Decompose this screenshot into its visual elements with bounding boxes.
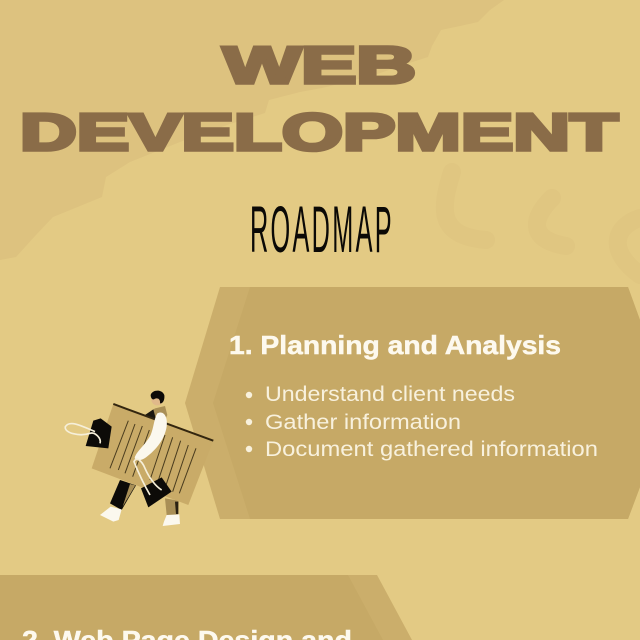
panel 1 list: Gather information (265, 410, 461, 434)
torso (145, 406, 167, 423)
back leg (165, 498, 179, 515)
panel 2 inner shape (0, 575, 383, 640)
panel 1 outer hexagon (185, 287, 640, 519)
head (151, 393, 163, 405)
hair (151, 391, 164, 403)
panel: web page design (0, 575, 412, 640)
panel 1 heading: 1. Planning and Analysis (229, 330, 561, 360)
panel 1 inner hexagon (213, 287, 640, 519)
left bag handle (65, 424, 100, 443)
front leg (110, 480, 136, 510)
title line: WEB: WEB (223, 37, 416, 95)
board top edge (113, 404, 213, 441)
background blotch (0, 0, 504, 260)
right bag handle (134, 459, 162, 495)
panel 2 outer shape (0, 575, 412, 640)
panel: planning and analysis (185, 287, 640, 519)
panel 1 list: Document gathered information (265, 437, 598, 461)
front shoe (100, 507, 122, 522)
board (92, 404, 213, 505)
left bag (86, 418, 112, 448)
panel 1 list: Understand client needs (265, 382, 515, 406)
illustration: person carrying a board and bags (65, 391, 213, 526)
title line: DEVELOPMENT: DEVELOPMENT (20, 104, 618, 162)
subtitle: ROADMAP (250, 193, 394, 267)
board lines (110, 421, 196, 493)
white arm (135, 413, 167, 460)
back shoe (163, 514, 180, 526)
background faint lettering (445, 172, 640, 275)
title (20, 37, 618, 162)
right bag (141, 477, 172, 507)
panel 1 list (246, 382, 598, 461)
